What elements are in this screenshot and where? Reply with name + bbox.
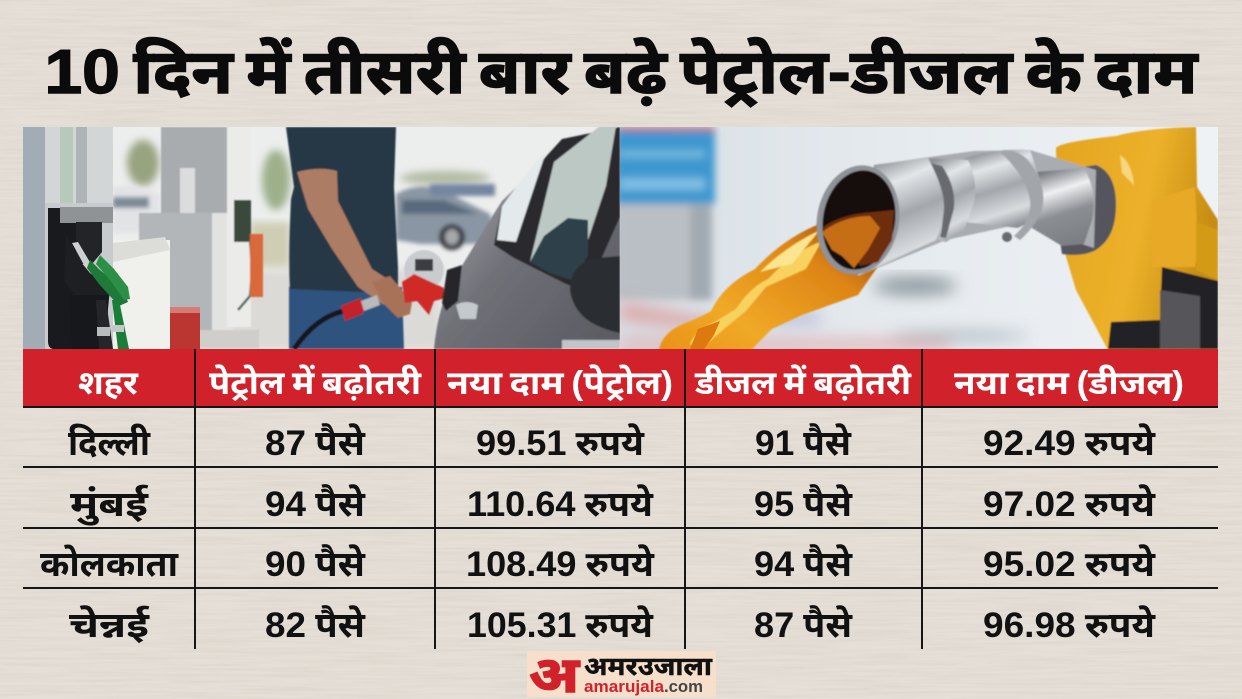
- header: new diesel price: नया दाम (डीजल): [954, 364, 1184, 401]
- row: Delhi: 91 पैसे: [755, 422, 852, 463]
- row: Delhi: 87 पैसे: [265, 422, 366, 463]
- row: Mumbai: 97.02 रुपये: [983, 484, 1156, 524]
- row: Delhi: 99.51 रुपये: [476, 423, 645, 463]
- title: 10 दिन में तीसरी बार बढ़े पेट्रोल-डीजल के दाम: [44, 36, 1199, 107]
- car door: [434, 126, 620, 349]
- row: Chennai: 82 पैसे: [265, 604, 366, 645]
- row: Mumbai: मुंबई: [70, 484, 149, 526]
- header: petrol hike: पेट्रोल में बढ़ोतरी: [209, 363, 422, 402]
- nozzle: [808, 127, 1218, 350]
- row: Kolkata: 108.49 रुपये: [466, 544, 655, 584]
- row: Chennai: 105.31 रुपये: [467, 605, 654, 645]
- row: Chennai: 96.98 रुपये: [983, 605, 1156, 645]
- row: Kolkata: 90 पैसे: [265, 543, 366, 584]
- logo url: amarujala: [584, 677, 665, 696]
- row: Mumbai: [70, 483, 1156, 526]
- row: Kolkata: 94 पैसे: [754, 543, 853, 584]
- row: Mumbai: 95 पैसे: [754, 483, 853, 524]
- row: Delhi: 92.49 रुपये: [983, 423, 1156, 463]
- row: Chennai: चेन्नई: [69, 605, 150, 645]
- row: Delhi: [68, 422, 1156, 463]
- header: new petrol price: नया दाम (पेट्रोल): [447, 363, 673, 402]
- logo: Amar Ujala: .com: [664, 677, 703, 696]
- oil stream: [658, 224, 878, 349]
- row: Kolkata: कोलकाता: [40, 544, 179, 584]
- photo: man refuelling car: [23, 126, 620, 350]
- left pump: [23, 127, 200, 349]
- row: Kolkata: 95.02 रुपये: [983, 544, 1156, 584]
- header: city: शहर: [78, 364, 139, 401]
- row: Mumbai: 94 पैसे: [265, 483, 366, 524]
- row: Chennai: [69, 604, 1156, 645]
- table grid: [23, 349, 1218, 649]
- row: Mumbai: 110.64 रुपये: [467, 484, 654, 524]
- photo: oil pouring from nozzle: [620, 127, 1218, 349]
- logo: Amar Ujala: [527, 647, 716, 699]
- row: Chennai: 87 पैसे: [754, 604, 853, 645]
- logo wordmark: अमरउजाला: [584, 651, 713, 681]
- table header band: [23, 349, 1218, 407]
- man: [286, 127, 446, 349]
- header: diesel hike: डीजल में बढ़ोतरी: [694, 364, 912, 401]
- row: Kolkata: [40, 543, 1156, 584]
- forecourt pump: [139, 127, 263, 348]
- background cars: [113, 184, 495, 250]
- row: Delhi: दिल्ली: [68, 423, 151, 463]
